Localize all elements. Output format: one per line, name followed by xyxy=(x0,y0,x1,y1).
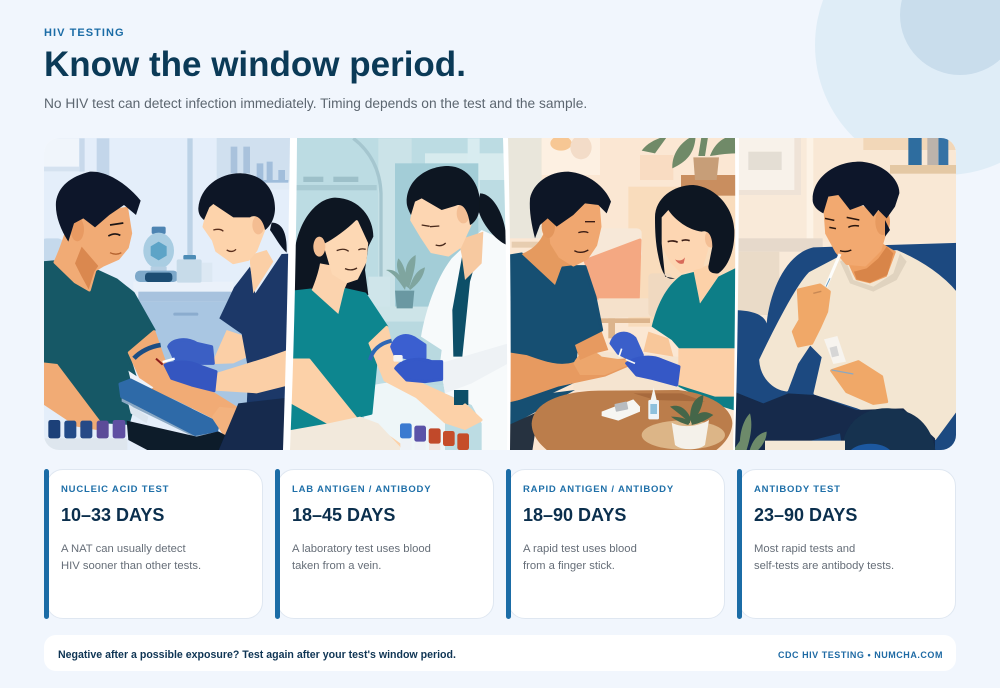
subtitle: No HIV test can detect infection immediately. Timing depends on the test and the sample. xyxy=(44,96,587,111)
card: lab antigen/antibody xyxy=(275,469,494,619)
man's shirt xyxy=(505,254,602,403)
card description: Most rapid tests and xyxy=(754,542,855,554)
card description: A laboratory test uses blood xyxy=(292,542,431,554)
man's arms xyxy=(44,362,100,430)
title: Know the window period. xyxy=(44,45,466,84)
woman's shirt xyxy=(652,267,738,348)
card description xyxy=(61,542,201,572)
shirt xyxy=(282,289,387,432)
man's face xyxy=(522,234,572,285)
tube rack xyxy=(44,420,128,450)
decorative background circle: small xyxy=(900,0,1000,75)
lab bottle xyxy=(152,227,166,234)
plant xyxy=(730,413,767,455)
card description xyxy=(754,542,894,572)
card label: LAB ANTIGEN / ANTIBODY xyxy=(292,484,431,495)
arm rest xyxy=(128,371,153,390)
hair xyxy=(813,162,899,218)
retest callout: Negative after a possible exposure? Test again after your test's window period. xyxy=(58,648,456,660)
footer bar xyxy=(44,635,956,671)
card description: from a finger stick. xyxy=(523,560,615,572)
other hand xyxy=(832,362,887,403)
card label: ANTIBODY TEST xyxy=(754,484,841,495)
card: nucleic acid test xyxy=(44,469,263,619)
card description: self-tests are antibody tests. xyxy=(754,560,894,572)
swab xyxy=(826,254,840,287)
scene 4: antibody self-test xyxy=(730,133,963,455)
card description: taken from a vein. xyxy=(292,560,381,572)
card description: A NAT can usually detect xyxy=(61,542,186,554)
scene 3: rapid antigen/antibody test xyxy=(502,133,742,455)
neck xyxy=(849,244,896,284)
hand with swab xyxy=(793,285,829,346)
gloves xyxy=(392,336,425,358)
man's shirt xyxy=(37,262,154,423)
nurse xyxy=(213,330,248,364)
source credit: CDC HIV TESTING • NUMCHA.COM xyxy=(778,650,943,660)
pants xyxy=(730,390,935,455)
test strip xyxy=(824,336,846,364)
sweater xyxy=(761,252,963,438)
card: antibody test xyxy=(737,469,956,619)
eyebrow label: HIV TESTING xyxy=(44,27,125,39)
tubes xyxy=(400,423,469,450)
illustration strip: four testing scenes xyxy=(44,138,956,450)
card label: NUCLEIC ACID TEST xyxy=(61,484,169,495)
gloves xyxy=(169,340,213,363)
pants xyxy=(126,420,226,450)
mat xyxy=(642,420,725,450)
sofa xyxy=(730,243,963,455)
days range: 18–45 DAYS xyxy=(292,505,395,525)
table xyxy=(532,390,732,455)
woman hair back xyxy=(294,198,374,295)
card description xyxy=(292,542,431,572)
plant pot xyxy=(672,420,709,449)
neck/face xyxy=(312,263,348,314)
days range: 23–90 DAYS xyxy=(754,505,857,525)
test cassette xyxy=(602,399,640,421)
man's neck and face xyxy=(55,208,131,290)
decorative background circle: large xyxy=(815,0,1000,175)
mug xyxy=(848,444,893,455)
card description: A rapid test uses blood xyxy=(523,542,637,554)
gloves xyxy=(611,333,642,360)
card: rapid antigen/antibody xyxy=(506,469,725,619)
arms xyxy=(282,360,400,450)
card label: RAPID ANTIGEN / ANTIBODY xyxy=(523,484,674,495)
man's arms xyxy=(505,353,628,403)
days range: 18–90 DAYS xyxy=(523,505,626,525)
days range: 10–33 DAYS xyxy=(61,505,164,525)
card description: HIV sooner than other tests. xyxy=(61,560,201,572)
man's hair xyxy=(56,172,141,242)
dropper bottle xyxy=(648,400,659,419)
plant xyxy=(386,255,425,290)
cabinet xyxy=(363,382,445,455)
face xyxy=(825,195,887,265)
scene 1: nucleic acid test blood draw xyxy=(37,133,297,455)
header xyxy=(44,27,587,111)
doctor xyxy=(421,230,508,450)
woman's face xyxy=(661,210,708,272)
pants xyxy=(290,416,400,450)
card description xyxy=(523,542,637,572)
pillow xyxy=(585,240,640,298)
scene 2: lab antigen/antibody test xyxy=(290,138,507,450)
